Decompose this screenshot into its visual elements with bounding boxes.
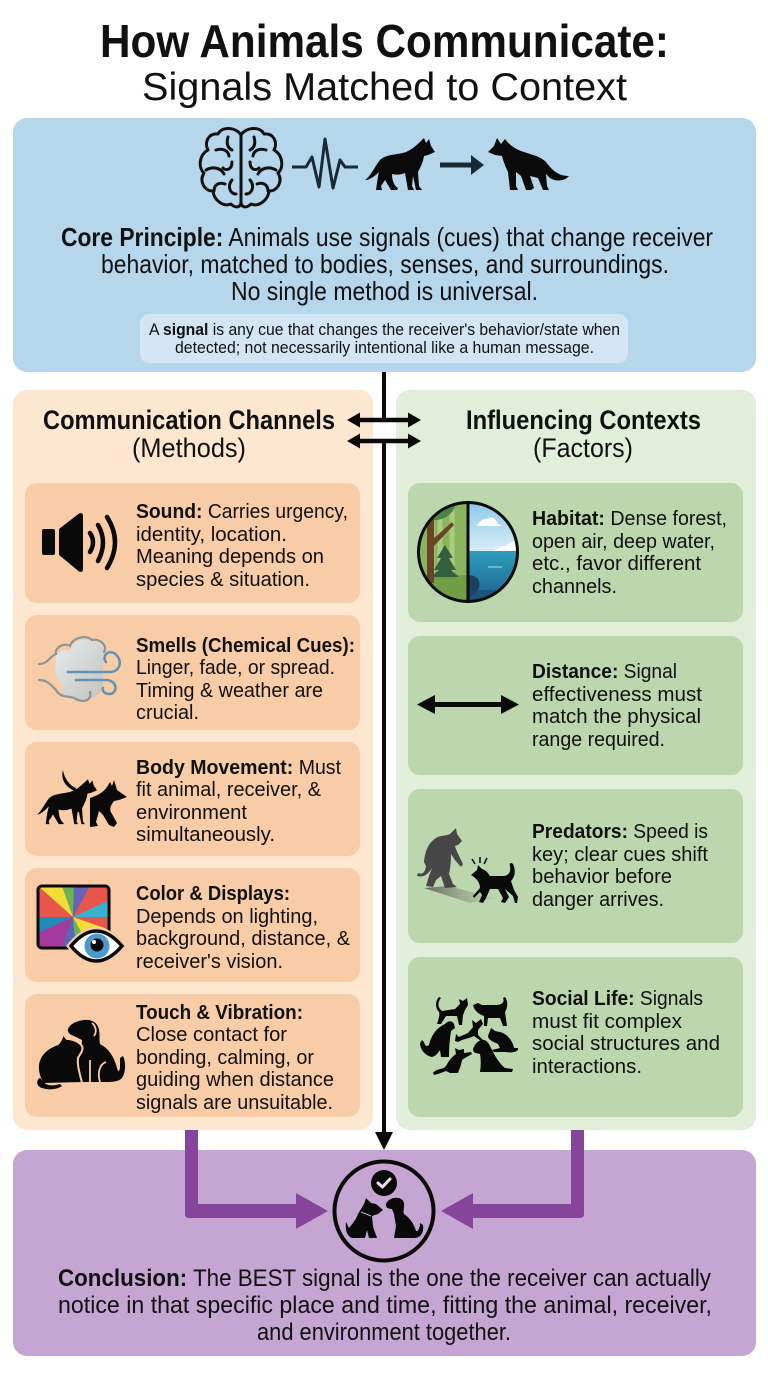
icon: predator and alert prey — [417, 828, 518, 903]
signal definition callout: A signal is any cue that changes the receiver's behavior/state when — [149, 321, 620, 339]
arrow: lower two-way link — [347, 434, 421, 448]
core principle text: behavior, matched to bodies, senses, and surroundings. — [101, 249, 669, 279]
color text — [136, 882, 350, 973]
sound text: species & situation. — [136, 568, 310, 591]
arrow: central connector — [375, 372, 393, 1150]
color text: Depends on lighting, — [136, 905, 318, 928]
icon: color panel and eye — [38, 886, 127, 965]
predators text — [532, 820, 708, 911]
habitat text: channels. — [532, 575, 617, 598]
predators text: danger arrives. — [532, 888, 664, 911]
body movement text: Body Movement: Must — [136, 756, 341, 779]
panel: communication channels — [13, 390, 373, 1130]
predators text: key; clear cues shift — [532, 843, 708, 866]
icon: signal pulse — [292, 139, 358, 188]
distance text: effectiveness must — [532, 683, 702, 706]
arrow: upper two-way link — [347, 412, 421, 428]
sound text: Meaning depends on — [136, 545, 324, 568]
body movement text: fit animal, receiver, & — [136, 778, 321, 801]
panel: core principle — [13, 118, 756, 372]
icon: forest and water habitat — [418, 500, 518, 603]
social life text: interactions. — [532, 1055, 642, 1078]
predators text: behavior before — [532, 865, 672, 888]
heading: communication channels — [43, 405, 335, 463]
conclusion text: notice in that specific place and time, fitting the animal, receiver, — [58, 1292, 712, 1319]
habitat text: Habitat: Dense forest, — [532, 507, 727, 530]
habitat text: open air, deep water, — [532, 530, 715, 553]
icon: cat and dog cuddling — [37, 1020, 125, 1089]
smells text: Timing & weather are — [136, 679, 323, 702]
distance text — [532, 660, 702, 751]
color text: receiver's vision. — [136, 950, 283, 973]
card: touch and vibration — [25, 994, 360, 1117]
conclusion text: and environment together. — [257, 1319, 511, 1346]
sound text: Sound: Carries urgency, — [136, 500, 348, 523]
core principle text: No single method is universal. — [231, 276, 538, 306]
body movement text: simultaneously. — [136, 823, 275, 846]
signal definition callout — [140, 314, 628, 363]
title — [100, 15, 669, 109]
smells text: Linger, fade, or spread. — [136, 656, 335, 679]
heading: influencing contexts — [466, 405, 701, 463]
icon: sender wolf — [365, 138, 435, 190]
smells text: crucial. — [136, 701, 199, 724]
habitat text: etc., favor different — [532, 552, 701, 575]
arrow: channels to conclusion — [185, 1130, 328, 1229]
icon: receiver wolf — [488, 138, 569, 190]
core principle text: Core Principle: Animals use signals (cues) that change receiver — [61, 222, 713, 252]
distance text: Distance: Signal — [532, 660, 677, 683]
body movement text: environment — [136, 801, 247, 824]
social life text — [532, 987, 720, 1078]
icon: distance double arrow — [417, 695, 519, 714]
icon: two moving wolves — [35, 770, 127, 827]
card: color and displays — [25, 868, 360, 982]
social life text: social structures and — [532, 1032, 720, 1055]
conclusion text — [58, 1265, 712, 1346]
conclusion text: Conclusion: The BEST signal is the one the receiver can actually — [58, 1265, 712, 1292]
distance text: range required. — [532, 728, 665, 751]
icon: brain — [200, 128, 282, 207]
icon: matched dogs with check — [334, 1162, 434, 1260]
touch text: bonding, calming, or — [136, 1046, 314, 1069]
heading: influencing contexts: (Factors) — [533, 433, 633, 463]
touch text: Touch & Vibration: — [136, 1001, 303, 1024]
heading: communication channels: (Methods) — [132, 433, 246, 463]
sound text — [136, 500, 348, 591]
card: body movement — [25, 742, 360, 856]
distance text: match the physical — [532, 705, 701, 728]
icon: social animal group — [420, 997, 518, 1075]
social life text: Social Life: Signals — [532, 987, 703, 1010]
title: How Animals Communicate: — [100, 15, 669, 67]
icon: scent cloud and wind — [39, 637, 120, 701]
color text: background, distance, & — [136, 927, 350, 950]
sound text: identity, location. — [136, 523, 287, 546]
social life text: must fit complex — [532, 1010, 683, 1033]
card: smells — [25, 615, 360, 730]
habitat text — [532, 507, 727, 598]
card: social life — [408, 957, 743, 1117]
card: sound — [25, 483, 360, 603]
arrow: sender to receiver — [440, 155, 484, 175]
panel: influencing contexts — [396, 390, 756, 1130]
card: distance — [408, 636, 743, 775]
predators text: Predators: Speed is — [532, 820, 708, 843]
heading: influencing contexts: Influencing Contexts — [466, 405, 701, 435]
touch text: signals are unsuitable. — [136, 1091, 333, 1114]
color text: Color & Displays: — [136, 882, 290, 905]
title: Signals Matched to Context — [142, 66, 627, 109]
icon: speaker — [42, 513, 115, 572]
card: habitat — [408, 483, 743, 622]
touch text: Close contact for — [136, 1023, 287, 1046]
signal definition callout: detected; not necessarily intentional like a human message. — [175, 339, 594, 357]
touch text: guiding when distance — [136, 1068, 334, 1091]
heading: communication channels: Communication Channels — [43, 405, 335, 435]
smells text — [136, 634, 355, 724]
arrow: contexts to conclusion — [441, 1130, 584, 1229]
smells text: Smells (Chemical Cues): — [136, 634, 355, 657]
body movement text — [136, 756, 341, 846]
touch text — [136, 1001, 334, 1114]
core principle text — [61, 222, 713, 306]
panel: conclusion — [13, 1150, 756, 1356]
card: predators — [408, 789, 743, 943]
